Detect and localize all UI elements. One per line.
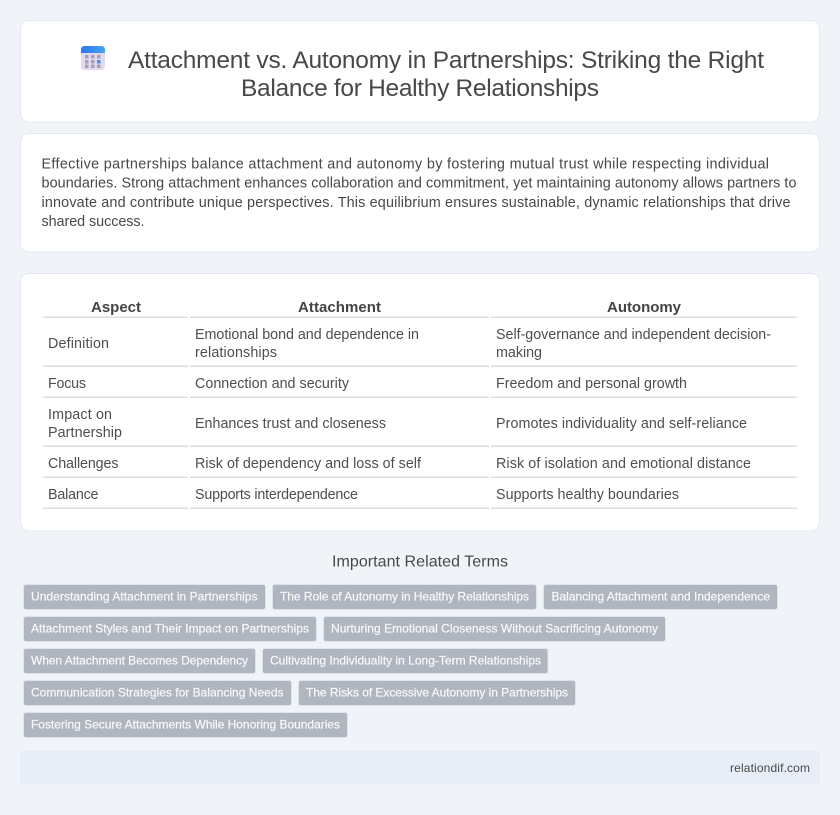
footer: relationdif.com	[730, 761, 810, 775]
text block: introduction: Effective partnerships balance attachment and autonomy by fostering mutual trust while respecting individual	[42, 156, 769, 172]
tag: balancing attachment: Balancing Attachment and Independence	[552, 590, 770, 604]
icon: calendar	[81, 46, 105, 70]
table row: challenges: Risk of dependency and loss of self	[195, 456, 421, 472]
panel: related term tags	[24, 584, 778, 738]
tag: understanding attachment	[24, 584, 266, 610]
tag: individuality: Cultivating Individuality in Long-Term Relationships	[270, 654, 541, 668]
text block: introduction: shared success.	[42, 214, 144, 230]
text block: introduction	[42, 156, 796, 230]
tag: nurturing closeness: Nurturing Emotional Closeness Without Sacrificing Autonomy	[331, 622, 658, 636]
table header row	[91, 299, 682, 316]
table row: challenges: Risk of isolation and emotional distance	[496, 456, 751, 472]
table row: balance	[48, 487, 679, 503]
footer	[20, 751, 820, 784]
tag: communication: Communication Strategies for Balancing Needs	[31, 686, 284, 700]
title: Balance for Healthy Relationships	[241, 75, 599, 102]
tag: dependency	[24, 648, 256, 674]
tag: attachment styles	[24, 616, 316, 642]
table row: impact on partnership	[48, 407, 747, 441]
tag: dependency: When Attachment Becomes Dependency	[31, 654, 248, 668]
table header row: Attachment	[298, 299, 381, 316]
table row: challenges: Challenges	[48, 456, 118, 472]
table row: focus: Connection and security	[195, 376, 350, 392]
tag: balancing attachment	[544, 584, 778, 610]
table row: definition: relationships	[195, 345, 277, 361]
table row: impact on partnership: Impact on	[48, 407, 112, 423]
table row: definition: Self-governance and independent decision-	[496, 327, 771, 343]
table row: focus	[48, 376, 687, 392]
tag: excessive autonomy	[298, 680, 576, 706]
table row: impact on partnership: Promotes individuality and self-reliance	[496, 416, 747, 432]
tag: secure attachments	[24, 712, 348, 738]
tag: role of autonomy	[272, 584, 536, 610]
table row: impact on partnership: Partnership	[48, 425, 122, 441]
tag: secure attachments: Fostering Secure Attachments While Honoring Boundaries	[31, 718, 340, 732]
panel: header	[20, 20, 820, 122]
table row: balance: Supports interdependence	[195, 487, 358, 503]
table row: definition: making	[496, 345, 542, 361]
table row: balance: Supports healthy boundaries	[496, 487, 679, 503]
table row: impact on partnership: Enhances trust and closeness	[195, 416, 386, 432]
table header row: Aspect	[91, 299, 141, 316]
tag: attachment styles: Attachment Styles and Their Impact on Partnerships	[31, 622, 309, 636]
tag: understanding attachment: Understanding Attachment in Partnerships	[31, 590, 258, 604]
title	[128, 47, 764, 102]
tag: nurturing closeness	[324, 616, 666, 642]
panel: introduction	[20, 134, 820, 252]
text block: introduction: boundaries. Strong attachment enhances collaboration and commitment, yet maintaining autonomy allows partners to	[42, 176, 796, 192]
tag: individuality	[262, 648, 548, 674]
table row: definition	[48, 327, 771, 361]
heading: important related terms: Important Related Terms	[332, 554, 508, 570]
table rules	[43, 316, 797, 509]
table row: challenges	[48, 456, 751, 472]
tag: role of autonomy: The Role of Autonomy in Healthy Relationships	[280, 590, 529, 604]
table row: definition: Emotional bond and dependence in	[195, 327, 419, 343]
table row: balance: Balance	[48, 487, 99, 503]
tag: excessive autonomy: The Risks of Excessive Autonomy in Partnerships	[306, 686, 568, 700]
title: Attachment vs. Autonomy in Partnerships: Striking the Right	[128, 47, 764, 74]
panel: comparison table	[20, 274, 820, 531]
table header row: Autonomy	[607, 299, 682, 316]
table row: focus: Focus	[48, 376, 86, 392]
table row: focus: Freedom and personal growth	[496, 376, 687, 392]
tag: communication	[24, 680, 292, 706]
text block: introduction: innovate and contribute unique perspectives. This equilibrium ensures sustainable, dynamic relationships that drive	[42, 195, 790, 211]
table row: definition: Definition	[48, 336, 109, 352]
